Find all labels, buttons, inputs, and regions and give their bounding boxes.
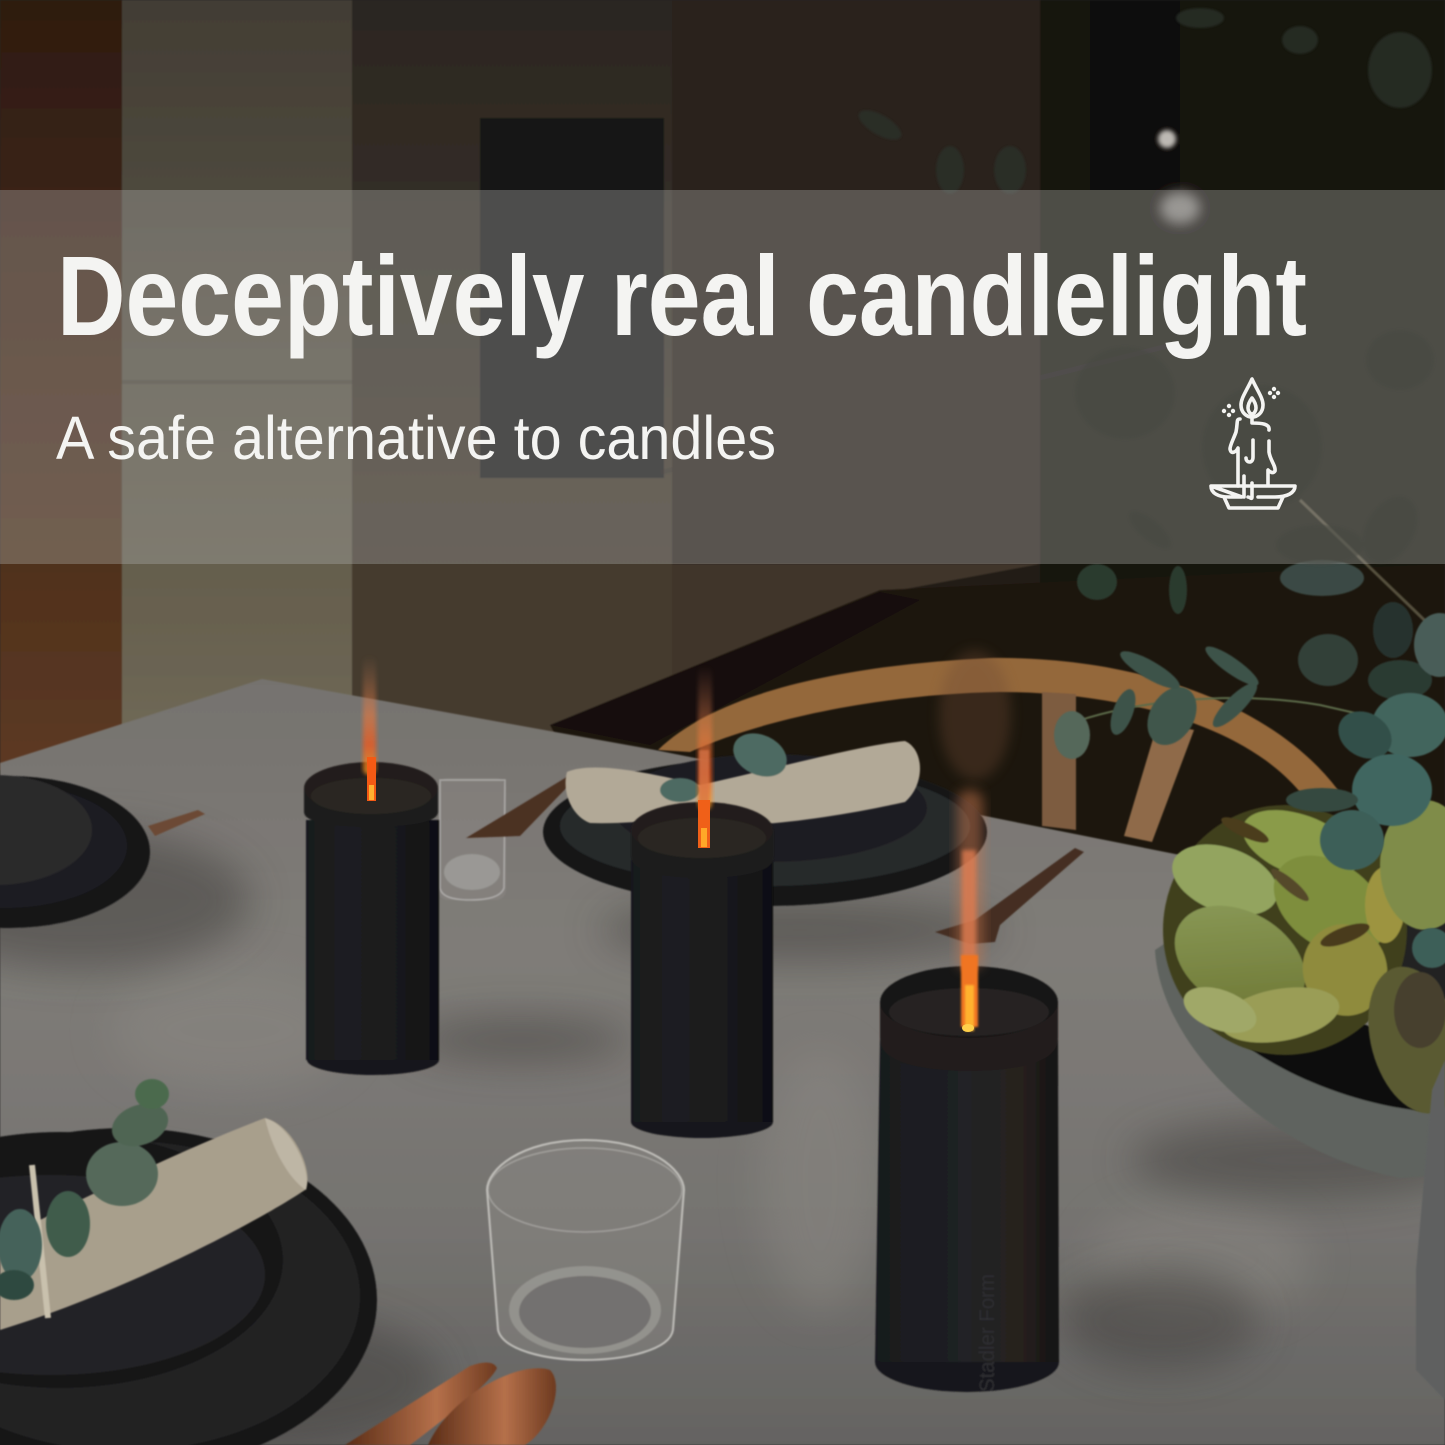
napkin: front left bbox=[0, 1118, 308, 1330]
glass: back bbox=[438, 778, 506, 900]
artichoke: right top bbox=[1380, 800, 1445, 930]
background: room wall bbox=[0, 0, 1445, 900]
subtitle: A safe alternative to candles bbox=[56, 404, 776, 472]
cutlery: back bbox=[466, 775, 576, 838]
table shadows bbox=[0, 830, 1445, 1445]
candle diffuser: middle bbox=[631, 802, 774, 1138]
candle diffuser: back bbox=[304, 762, 439, 1075]
plate set: top left bbox=[0, 775, 205, 928]
translucent text band bbox=[0, 190, 1445, 573]
bowl bbox=[1155, 940, 1432, 1178]
background leaves: top right bbox=[854, 8, 1432, 194]
flame: middle bbox=[698, 665, 712, 848]
vase bbox=[1416, 1060, 1445, 1400]
eucalyptus sprig: front left bbox=[0, 1079, 174, 1300]
artichoke: right lower bbox=[1353, 956, 1445, 1124]
leaves seen through band bbox=[1075, 330, 1434, 573]
artichoke: main bbox=[1155, 796, 1407, 1055]
candle diffuser: front bbox=[875, 966, 1059, 1392]
flame: back bbox=[363, 655, 376, 801]
cutlery: front copper bbox=[345, 1362, 556, 1445]
icon: candle with sparkles bbox=[1211, 379, 1295, 508]
plate set: middle bbox=[543, 754, 987, 906]
dinner plate: front left bbox=[0, 1128, 377, 1445]
table highlights bbox=[110, 970, 1310, 1320]
napkin: middle plate bbox=[566, 725, 920, 824]
eucalyptus branch: foreground bbox=[1054, 500, 1445, 968]
flame: front bbox=[957, 790, 983, 1032]
glass: front bbox=[487, 1140, 684, 1360]
chair bbox=[658, 658, 1338, 842]
table bbox=[0, 679, 1445, 1445]
steam bbox=[939, 650, 1011, 780]
cutlery: right fork bbox=[935, 848, 1084, 944]
brand mark: Stadler Form bbox=[976, 1274, 999, 1392]
